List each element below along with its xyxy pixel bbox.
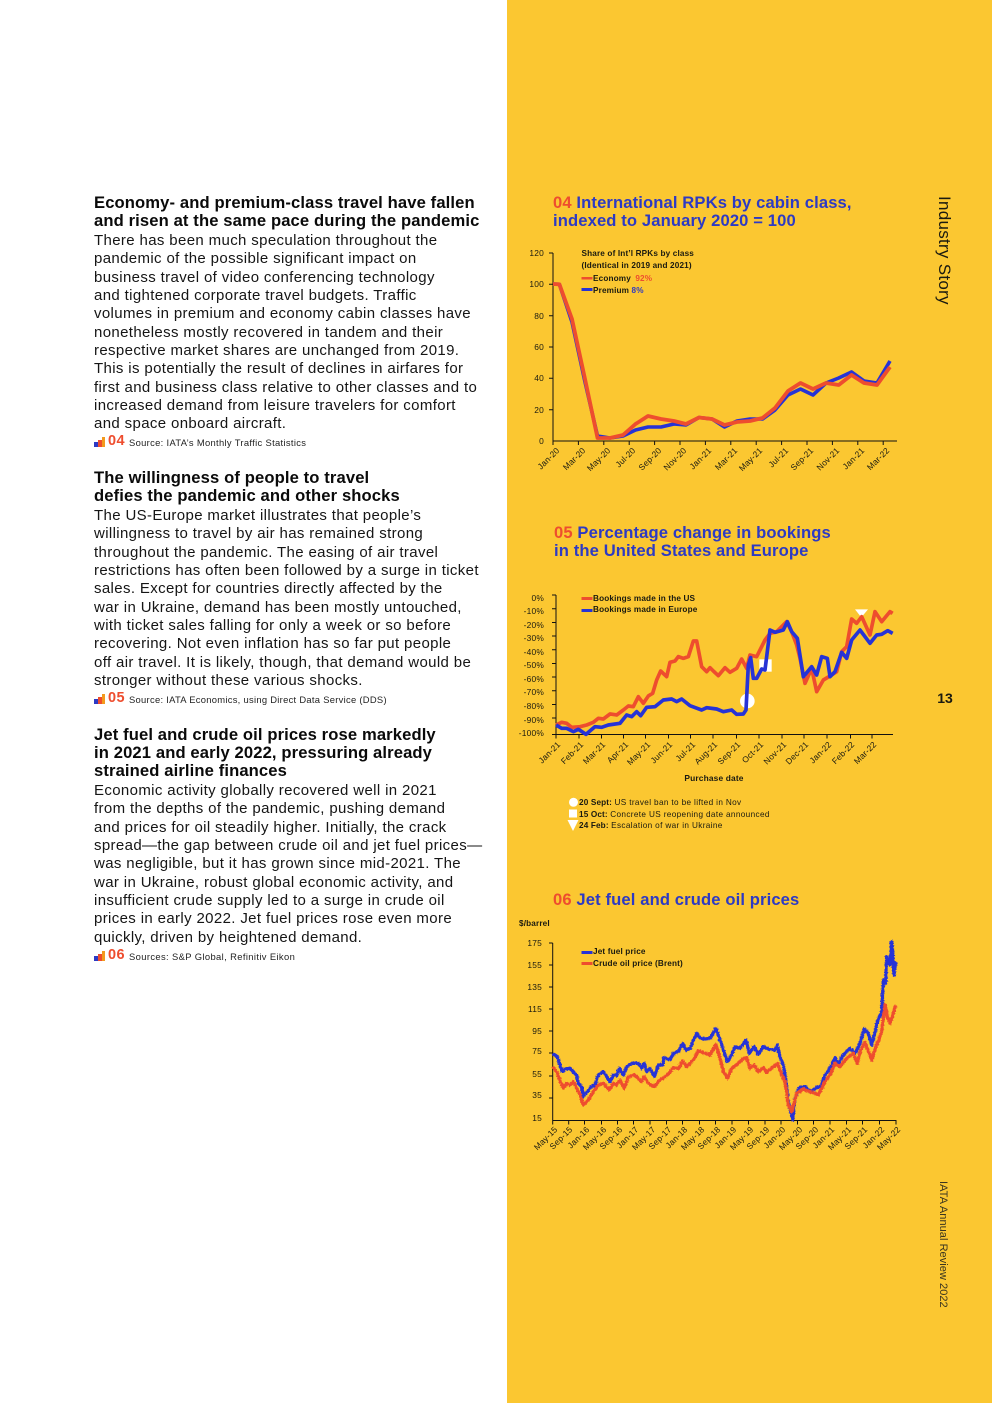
line chart 04: international RPKs: Sep-20 (636, 445, 664, 472)
marker: square (759, 659, 772, 672)
heading: willingness to travel: The willingness of people to travel (94, 468, 369, 487)
line chart 06: jet fuel and crude: Sep-17 (646, 1124, 674, 1151)
event key 05: 24 Feb: Escalation of war in Ukraine (579, 821, 723, 830)
chart title 06: 06 Jet fuel and crude oil prices (553, 890, 799, 909)
legend 05: Bookings made in Europe (593, 605, 698, 614)
line chart 04: international RPKs: Mar-22 (865, 445, 892, 472)
line chart 06: jet fuel and crude: 155 (527, 960, 542, 970)
chart title 05 (554, 523, 831, 560)
heading: jet fuel and crude: Jet fuel and crude oil prices rose markedly (94, 725, 436, 744)
source note 05: Source: IATA Economics, using Direct Data Service (DDS) (129, 694, 387, 705)
line chart 04: international RPKs: 20 (534, 405, 544, 415)
source note 04 (94, 433, 306, 449)
line chart 06: jet fuel and crude: 55 (532, 1069, 542, 1079)
line chart 06: jet fuel and crude (519, 919, 903, 1152)
line chart 04: international RPKs: May-21 (737, 445, 765, 473)
source note 06 (94, 947, 295, 963)
line chart 06: jet fuel and crude: Sep-18 (695, 1124, 723, 1151)
line chart 06: jet fuel and crude: May-22 (875, 1124, 903, 1152)
line chart 06: jet fuel and crude: Sep-20 (793, 1124, 821, 1151)
source note 04: 04 (108, 433, 125, 449)
body text: willingness to travel (94, 507, 479, 689)
marker: triangle (855, 609, 868, 617)
heading: jet fuel and crude: strained airline finances (94, 761, 287, 780)
body text: jet fuel and crude: insufficient crude supply led to a surge in crude oil (94, 892, 445, 909)
line chart 06: jet fuel and crude: 75 (532, 1046, 542, 1056)
line chart 04: international RPKs: Jan-21 (687, 445, 714, 471)
body text: willingness to travel: war in Ukraine, demand has been mostly untouched, (94, 599, 462, 616)
heading: jet fuel and crude: in 2021 and early 2022, pressuring already (94, 743, 432, 762)
body text: economy and premium: This is potentially the result of declines in airfares for (94, 360, 463, 377)
body text: willingness to travel: with ticket sales falling for only a week or so before (94, 617, 451, 634)
legend 04: (Identical in 2019 and 2021) (582, 261, 692, 270)
line chart 04: international RPKs (529, 248, 897, 473)
chart title 04: indexed to January 2020 = 100 (553, 211, 796, 230)
chart title 05: in the United States and Europe (554, 541, 808, 560)
series: premium (553, 284, 890, 438)
line chart 04: international RPKs: Mar-21 (713, 445, 740, 472)
marker: circle (740, 694, 755, 708)
line chart 06: jet fuel and crude: Jan-16 (565, 1124, 592, 1150)
line chart 06: jet fuel and crude: Jan-17 (614, 1124, 641, 1150)
line chart 05: bookings: Feb-22 (830, 739, 857, 766)
line chart 04: international RPKs: Jan-20 (535, 445, 562, 471)
line chart 05: bookings: -100% (519, 728, 544, 738)
line chart 05: bookings: -50% (524, 660, 544, 670)
line chart 04: international RPKs: 100 (529, 279, 544, 289)
body text: jet fuel and crude: war in Ukraine, robust global economic activity, and (94, 874, 453, 891)
line chart 05: bookings: May-21 (625, 739, 653, 767)
body text: jet fuel and crude: and prices for oil steadily higher. Initially, the crack (94, 819, 447, 836)
body text: willingness to travel: restrictions has often been followed by a surge in ticket (94, 562, 479, 579)
body text: jet fuel and crude: spread—the gap between crude oil and jet fuel prices— (94, 837, 482, 854)
heading: economy and premium: and risen at the same pace during the pandemic (94, 211, 479, 230)
publication label: IATA Annual Review 2022 (937, 1181, 949, 1308)
source note 05: 05 (108, 690, 125, 706)
body text: economy and premium: increased demand from leisure travelers for comfort (94, 397, 456, 414)
body text: jet fuel and crude: quickly, driven by heightened demand. (94, 928, 362, 946)
line chart 05: bookings: -70% (524, 687, 544, 697)
line chart 05: bookings: 0% (531, 593, 544, 603)
body text: economy and premium: respective market shares are unchanged from 2019. (94, 342, 459, 359)
body text: willingness to travel: stronger without these various shocks. (94, 672, 363, 689)
line chart 05: bookings: Mar-22 (852, 739, 879, 766)
body text: jet fuel and crude: prices in early 2022. Jet fuel prices rose even more (94, 910, 452, 927)
legend 05: Bookings made in the US (593, 594, 696, 603)
line chart 06: jet fuel and crude: Sep-21 (842, 1124, 870, 1151)
line chart 06: jet fuel and crude: Sep-16 (597, 1124, 625, 1151)
series: Europe bookings (556, 622, 893, 734)
body text: economy and premium: and space onboard aircraft. (94, 415, 286, 432)
line chart 06: jet fuel and crude: Jan-19 (712, 1124, 739, 1150)
legend 06 (582, 947, 683, 968)
page number: 13 (937, 690, 953, 706)
body text: economy and premium: There has been much speculation throughout the (94, 232, 437, 249)
line chart 05: bookings: Sep-21 (715, 739, 743, 766)
line chart 05: bookings: -90% (524, 715, 544, 725)
line chart 06: jet fuel and crude: May-20 (777, 1124, 805, 1152)
line chart 05: bookings: -30% (524, 633, 544, 643)
line chart 06: jet fuel and crude: May-17 (630, 1124, 658, 1152)
line chart 05: bookings: Jan-21 (536, 739, 563, 765)
line chart 06: jet fuel and crude: 95 (532, 1026, 542, 1036)
body text: economy and premium: nonetheless mostly recovered in tandem and their (94, 324, 443, 341)
body text: willingness to travel: off air travel. It is likely, though, that demand would be (94, 654, 471, 670)
line chart 05: bookings: Jan-22 (807, 739, 834, 765)
line chart 05: bookings: Dec-21 (783, 739, 811, 766)
line chart 05: bookings: -10% (524, 606, 544, 616)
line chart 06: jet fuel and crude: May-19 (728, 1124, 756, 1152)
event key 05 (568, 798, 770, 831)
line chart 05: bookings: Jul-21 (673, 739, 698, 763)
line chart 05: bookings: -60% (524, 674, 544, 684)
line chart 06: jet fuel and crude: Jan-22 (860, 1124, 887, 1150)
yellow side panel (507, 0, 992, 1403)
line chart 05: bookings: Oct-21 (740, 739, 766, 765)
line chart 04: international RPKs: Mar-20 (561, 445, 588, 472)
body text: economy and premium (94, 232, 477, 432)
series: economy (553, 284, 890, 438)
body text: jet fuel and crude: was negligible, but it has grown since mid-2021. The (94, 855, 461, 872)
line chart 06: jet fuel and crude: Jan-21 (810, 1124, 837, 1150)
body text: economy and premium: pandemic of the possible significant impact on (94, 250, 417, 267)
line chart 05: bookings: Apr-21 (605, 739, 631, 765)
line chart 04: international RPKs: Jul-21 (766, 445, 791, 469)
body text: willingness to travel: recovering. Not even inflation has so far put people (94, 635, 451, 652)
legend 04 (582, 249, 694, 295)
line chart 05: bookings: Mar-21 (581, 739, 608, 766)
body text: economy and premium: volumes in premium and economy cabin classes have (94, 305, 471, 322)
legend 04: Economy 92% (593, 274, 653, 283)
line chart 04: international RPKs: Jan-21 (840, 445, 867, 471)
series: crude oil (553, 1005, 896, 1112)
line chart 06: jet fuel and crude: Sep-15 (547, 1124, 575, 1151)
line chart 05: bookings: Feb-21 (559, 739, 586, 766)
line chart 05: bookings: -40% (524, 647, 544, 657)
line chart 05: bookings: -20% (524, 620, 544, 630)
heading: jet fuel and crude (94, 725, 436, 780)
source note 06: Sources: S&P Global, Refinitiv Eikon (129, 951, 295, 962)
axis title: purchase date: Purchase date (684, 773, 744, 783)
body text: jet fuel and crude: from the depths of the pandemic, pushing demand (94, 800, 445, 817)
legend 04: Premium 8% (593, 286, 644, 295)
line chart 06: jet fuel and crude: 135 (527, 982, 542, 992)
line chart 04: international RPKs: Nov-20 (661, 445, 689, 472)
body text: jet fuel and crude (94, 782, 482, 946)
chart title 04 (553, 193, 852, 230)
line chart 06: jet fuel and crude: Jan-18 (663, 1124, 690, 1150)
body text: willingness to travel: willingness to travel by air has remained strong (94, 525, 423, 542)
event key 05: 20 Sept: US travel ban to be lifted in Nov (579, 798, 742, 807)
line chart 04: international RPKs: 60 (534, 342, 544, 352)
line chart 06: jet fuel and crude: Sep-19 (744, 1124, 772, 1151)
chart title 04: 04 International RPKs by cabin class, (553, 193, 852, 212)
body text: economy and premium: and tightened corporate travel budgets. Traffic (94, 287, 417, 304)
line chart 04: international RPKs: 0 (539, 436, 544, 446)
source note 06: 06 (108, 947, 125, 963)
body text: jet fuel and crude: Economic activity globally recovered well in 2021 (94, 782, 437, 799)
heading: willingness to travel: defies the pandemic and other shocks (94, 486, 400, 505)
source note 04: Source: IATA’s Monthly Traffic Statistics (129, 437, 306, 448)
line chart 06: jet fuel and crude: May-18 (679, 1124, 707, 1152)
legend 06: Crude oil price (Brent) (593, 959, 683, 968)
unit label: $/barrel (519, 919, 550, 928)
series: jet fuel (553, 942, 896, 1120)
line chart 04: international RPKs: Nov-21 (814, 445, 842, 472)
legend 05 (582, 594, 698, 614)
heading: economy and premium (94, 193, 479, 230)
line chart 06: jet fuel and crude: Jan-20 (761, 1124, 788, 1150)
line chart 06: jet fuel and crude: 35 (532, 1090, 542, 1100)
body text: willingness to travel: sales. Except for countries directly affected by the (94, 580, 443, 597)
line chart 04: international RPKs: 40 (534, 373, 544, 383)
line chart 04: international RPKs: May-20 (585, 445, 613, 473)
line chart 05: bookings: -80% (524, 701, 544, 711)
body text: willingness to travel: throughout the pandemic. The easing of air travel (94, 544, 438, 561)
line chart 06: jet fuel and crude: May-16 (581, 1124, 609, 1152)
line chart 06: jet fuel and crude: May-15 (532, 1124, 560, 1152)
line chart 06: jet fuel and crude: May-21 (826, 1124, 854, 1152)
line chart 04: international RPKs: Jul-20 (613, 445, 638, 469)
line chart 06: jet fuel and crude: 175 (527, 938, 542, 948)
series: US bookings (556, 612, 893, 727)
line chart 05: bookings: Nov-21 (761, 739, 789, 766)
heading: willingness to travel (94, 468, 400, 505)
source note 05 (94, 690, 387, 706)
legend 04: Share of Int’l RPKs by class (582, 249, 694, 258)
line chart 04: international RPKs: 120 (529, 248, 544, 258)
line chart 04: international RPKs: 80 (534, 311, 544, 321)
line chart 06: jet fuel and crude: 115 (528, 1004, 542, 1014)
line chart 05: bookings: Jun-21 (648, 739, 675, 765)
line chart 04: international RPKs: Sep-21 (788, 445, 816, 472)
section label: Industry Story: Industry Story (935, 196, 954, 305)
body text: willingness to travel: The US-Europe market illustrates that people’s (94, 507, 421, 524)
line chart 06: jet fuel and crude: 15 (532, 1113, 542, 1123)
event key 05: 15 Oct: Concrete US reopening date announced (579, 810, 770, 819)
line chart 05: bookings: Aug-21 (692, 739, 720, 766)
line chart 05: bookings (519, 593, 893, 831)
body text: economy and premium: first and business class relative to other classes and to (94, 378, 477, 396)
chart title 05: 05 Percentage change in bookings (554, 523, 831, 542)
heading: economy and premium: Economy- and premium-class travel have fallen (94, 193, 475, 212)
body text: economy and premium: business travel of video conferencing technology (94, 269, 435, 286)
legend 06: Jet fuel price (593, 947, 646, 956)
